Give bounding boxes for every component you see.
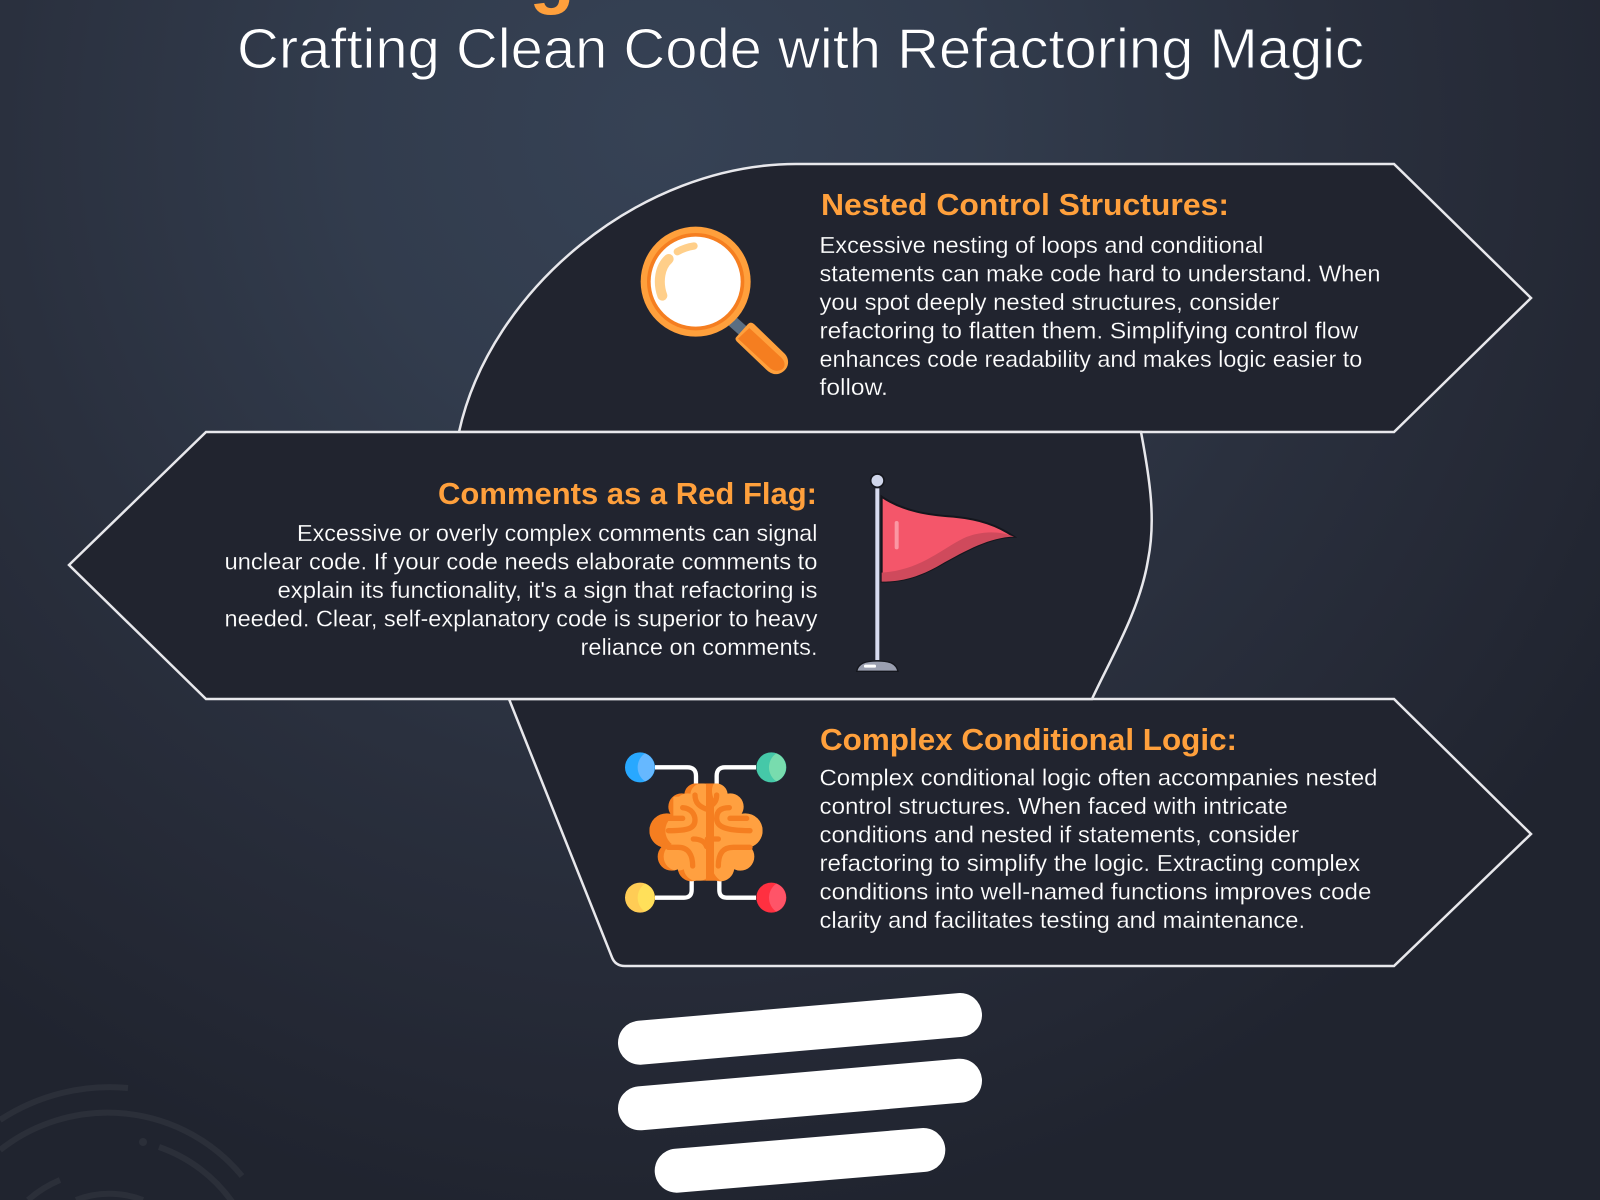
icon: magnifying glass	[641, 227, 788, 374]
heading: Complex Conditional Logic:	[820, 722, 1237, 757]
body text: Excessive or overly complex comments can signal	[297, 520, 818, 546]
panel: comments as a red flag	[69, 432, 1152, 699]
body text: refactoring to flatten them. Simplifying control flow	[820, 318, 1359, 344]
decorative concentric arcs	[0, 1087, 242, 1200]
body text: conditions and nested if statements, consider	[820, 822, 1299, 848]
body text	[820, 765, 1378, 933]
lightbulb base bars	[640, 1015, 960, 1171]
panel: nested control structures	[459, 164, 1531, 432]
body text: conditions into well-named functions improves code	[820, 879, 1371, 905]
body text	[820, 232, 1380, 400]
body text: Complex conditional logic often accompanies nested	[820, 765, 1378, 791]
body text: you spot deeply nested structures, consider	[820, 289, 1280, 315]
body text: clarity and facilitates testing and maintenance.	[820, 907, 1305, 933]
heading: Comments as a Red Flag:	[438, 476, 817, 511]
body text: control structures. When faced with intricate	[820, 793, 1288, 819]
heading: Nested Control Structures:	[821, 187, 1229, 222]
body text: explain its functionality, it's a sign that refactoring is	[278, 577, 818, 603]
body text: unclear code. If your code needs elaborate comments to	[224, 548, 818, 574]
body text: follow.	[820, 374, 888, 400]
body text	[224, 520, 818, 660]
body text: needed. Clear, self-explanatory code is superior to heavy	[224, 605, 818, 631]
icon: brain with four nodes	[625, 752, 786, 913]
body text: statements can make code hard to understand. When	[820, 260, 1380, 286]
body text: enhances code readability and makes logic easier to	[820, 346, 1362, 372]
icon: red flag	[857, 474, 1014, 671]
body text: refactoring to simplify the logic. Extracting complex	[820, 850, 1360, 876]
panel: complex conditional logic	[509, 699, 1531, 966]
subtitle: Crafting Clean Code with Refactoring Magic	[237, 17, 1364, 81]
body text: Excessive nesting of loops and conditional	[820, 232, 1263, 258]
body text: reliance on comments.	[580, 634, 818, 660]
